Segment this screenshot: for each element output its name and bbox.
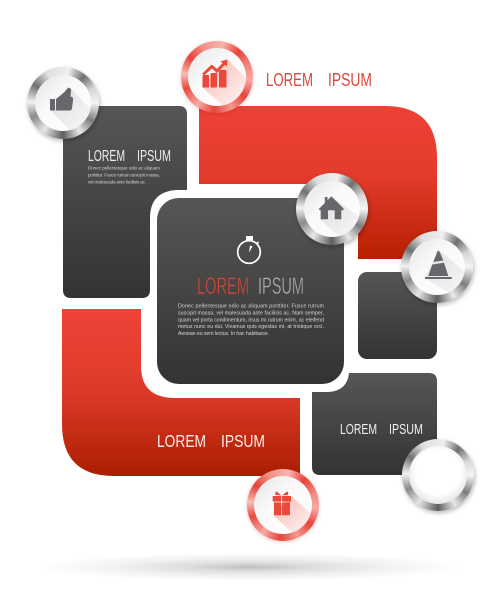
heading: bottom red: LOREM (157, 431, 206, 451)
heading: top: IPSUM (328, 69, 372, 90)
icon: home ring (296, 173, 368, 245)
heading: bottom-right (340, 421, 423, 438)
heading: top-left: IPSUM (137, 148, 171, 165)
text block: center: metus nunc eu dui. Vivamus quis egestas mi, at tristique orci. (178, 324, 324, 330)
heading: center: IPSUM (258, 273, 304, 300)
panel: top-left dark (63, 106, 187, 298)
text block: top-left: porttitor. Fusce rutrum suscipit massa, (88, 172, 160, 178)
text block: top-left: Donec pellentesque odio ac aliquam (88, 166, 160, 170)
text block: center: suscipit massa, vel malesuada ante facilisis ac. Nam semper, (178, 310, 324, 316)
icon: stopwatch (238, 236, 260, 263)
text block: top-left (88, 166, 160, 184)
panel: bottom red (62, 309, 300, 476)
heading: top (266, 69, 372, 90)
heading: bottom-right: LOREM (340, 421, 377, 438)
heading: bottom red: IPSUM (221, 431, 265, 451)
panel: top red (199, 106, 437, 259)
icon: gift ring (247, 469, 319, 541)
panel: bottom-right dark (312, 373, 437, 475)
text block: center: quam vel porta condimentum, risus mi rutrum enim, ac eleifend (178, 317, 324, 323)
heading: center: LOREM (197, 273, 249, 300)
icon: blank ring (402, 439, 474, 511)
text block: top-left: vel malesuada ante facilisis ac. (88, 180, 146, 184)
icon: cone ring (401, 231, 473, 303)
heading: bottom red (157, 431, 265, 451)
text block: center: Donec pellentesque odio ac aliquam porttitor. Fusce rutrum (178, 304, 324, 310)
heading: top: LOREM (266, 69, 313, 90)
panel: small dark right (358, 272, 437, 359)
icon: chart ring (181, 41, 253, 113)
text block: center: Aenean eu sem lectus. In hac habitasse. (178, 331, 269, 337)
heading: top-left: LOREM (88, 148, 125, 165)
heading: bottom-right: IPSUM (389, 421, 423, 438)
panel: center dark (157, 198, 344, 384)
text block: center (178, 304, 324, 337)
icon: thumbs up ring (27, 67, 99, 139)
heading: top-left (88, 148, 171, 165)
